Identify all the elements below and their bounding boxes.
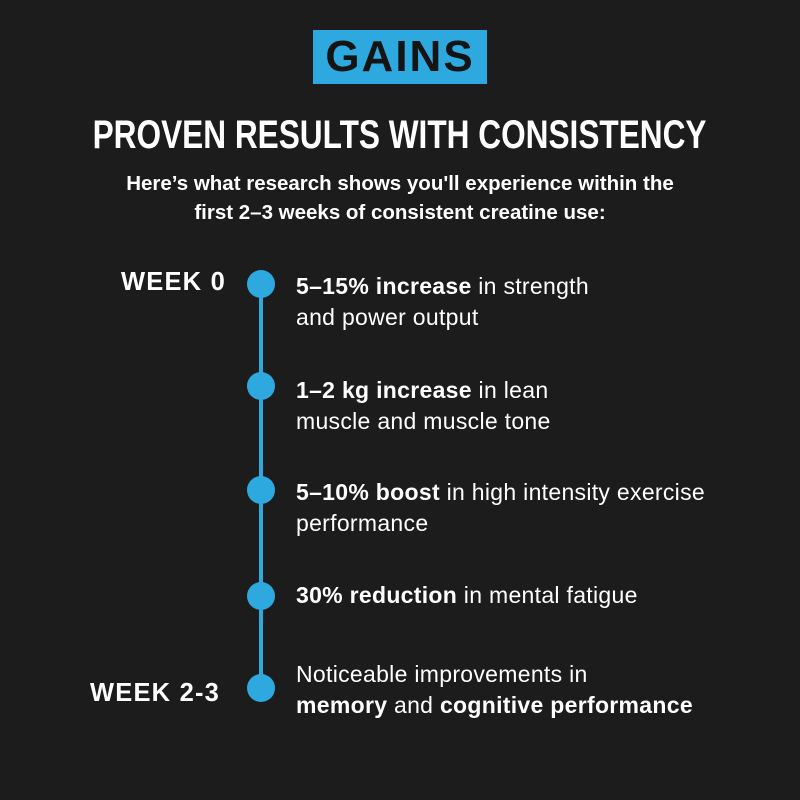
item 3: 5–10% boost in high intensity exercise bbox=[296, 479, 705, 505]
subtitle bbox=[126, 172, 674, 224]
subtitle: first 2–3 weeks of consistent creatine use: bbox=[194, 201, 606, 224]
timeline line bbox=[259, 284, 263, 688]
item 1 bbox=[296, 273, 589, 330]
title: PROVEN RESULTS WITH CONSISTENCY bbox=[93, 113, 707, 157]
dot 3 bbox=[247, 476, 275, 504]
dot 4 bbox=[247, 582, 275, 610]
item 5 bbox=[296, 661, 693, 718]
item 1: 5–15% increase in strength bbox=[296, 273, 589, 299]
item 4: 30% reduction in mental fatigue bbox=[296, 582, 638, 608]
item 2: muscle and muscle tone bbox=[296, 408, 551, 434]
item 3 bbox=[296, 479, 705, 536]
item 2 bbox=[296, 377, 551, 434]
label: week 2-3: WEEK 2-3 bbox=[90, 679, 220, 707]
item 3: performance bbox=[296, 510, 428, 536]
label: week 0: WEEK 0 bbox=[121, 268, 226, 296]
logo: GAINS bbox=[325, 32, 475, 81]
dot 2 bbox=[247, 372, 275, 400]
item 5: memory and cognitive performance bbox=[296, 692, 693, 718]
item 5: Noticeable improvements in bbox=[296, 661, 588, 687]
item 2: 1–2 kg increase in lean bbox=[296, 377, 548, 403]
subtitle: Here’s what research shows you'll experience within the bbox=[126, 172, 674, 195]
dot 5 bbox=[247, 674, 275, 702]
item 1: and power output bbox=[296, 304, 479, 330]
dot 1 bbox=[247, 270, 275, 298]
timeline bbox=[247, 270, 275, 702]
